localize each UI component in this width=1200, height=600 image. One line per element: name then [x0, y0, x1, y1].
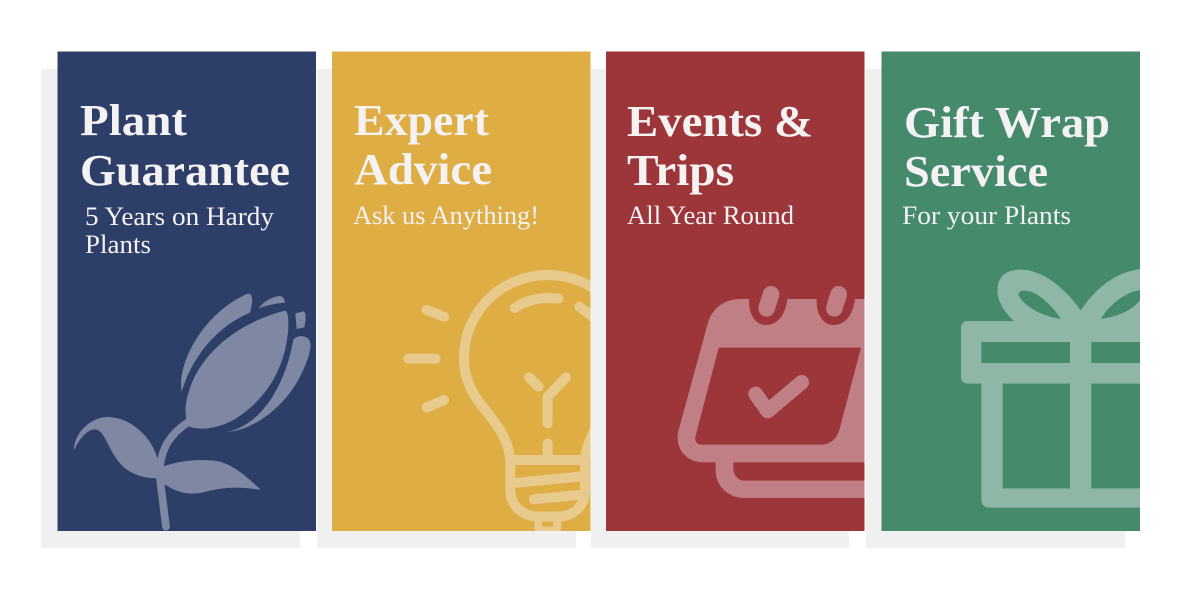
heading: expert advice: Expert	[354, 96, 489, 145]
icon: light bulb	[403, 270, 590, 531]
heading: plant guarantee: Plant	[80, 96, 187, 145]
panel: plant guarantee	[41, 52, 316, 548]
text: 5 years on hardy plants: 5 Years on Hardy	[85, 202, 274, 231]
panel: gift wrap service	[866, 52, 1142, 548]
heading: gift wrap service: Service	[904, 147, 1048, 196]
heading: events and trips: Trips	[627, 146, 734, 195]
heading: events and trips	[627, 97, 813, 195]
panel: expert advice	[317, 52, 590, 548]
heading: gift wrap service: Gift Wrap	[904, 98, 1110, 147]
text: for your plants: For your Plants	[902, 201, 1071, 230]
heading: plant guarantee	[80, 96, 290, 195]
heading: expert advice: Advice	[354, 145, 492, 194]
icon: gift box	[961, 269, 1142, 508]
icon: tulip	[74, 294, 310, 527]
text: 5 years on hardy plants	[85, 202, 274, 259]
heading: events and trips: Events &	[627, 97, 813, 146]
text: ask us anything: Ask us Anything!	[353, 201, 539, 230]
heading: gift wrap service	[904, 98, 1110, 196]
icon: calendar	[678, 294, 867, 498]
panel: events and trips	[591, 52, 867, 548]
text: 5 years on hardy plants: Plants	[85, 230, 151, 259]
heading: expert advice	[354, 96, 492, 194]
text: all year round: All Year Round	[627, 201, 794, 230]
infographic	[41, 52, 1140, 548]
heading: plant guarantee: Guarantee	[80, 146, 290, 195]
